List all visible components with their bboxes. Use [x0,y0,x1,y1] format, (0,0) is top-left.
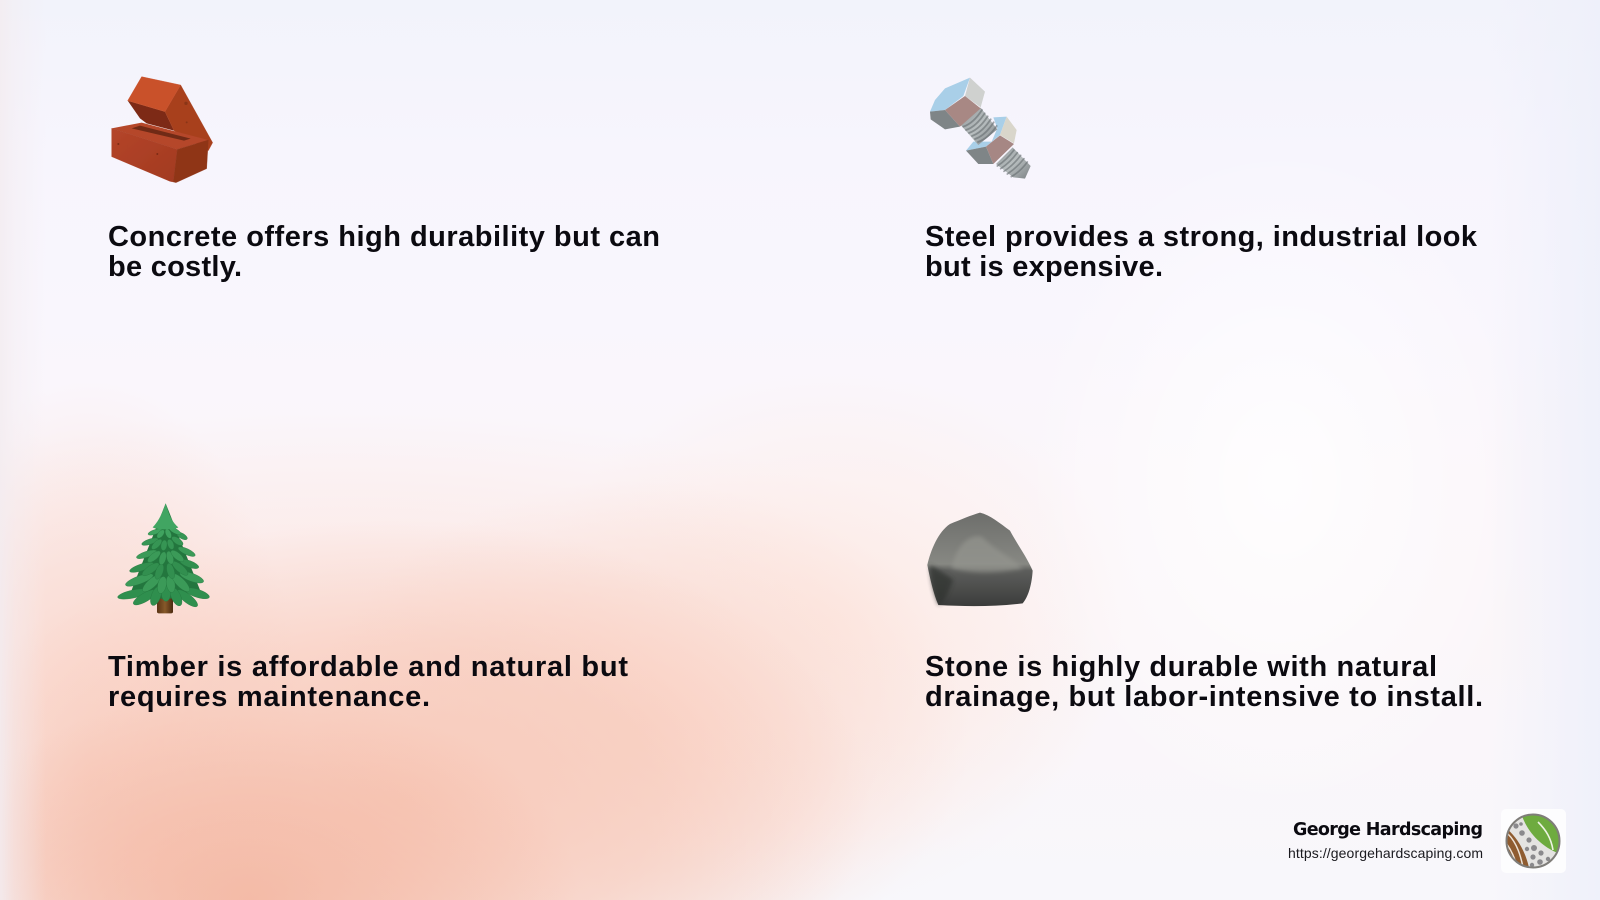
panel: concrete [108,77,660,283]
icon: brick [112,77,213,183]
panel: stone [925,513,1483,713]
icon: pine tree [117,503,211,613]
text: concrete: be costly. [108,251,242,283]
text: timber: Timber is affordable and natural but [108,651,628,683]
text: steel: Steel provides a strong, industrial look [925,221,1478,253]
panel: steel [925,78,1478,283]
brand footer [1288,809,1566,873]
brand name: George Hardscaping [1293,820,1483,840]
panel: timber [108,503,628,713]
text: steel: but is expensive. [925,251,1163,283]
text: timber: requires maintenance. [108,681,430,713]
text: stone: drainage, but labor-intensive to install. [925,681,1483,713]
logo [1501,809,1566,873]
text: stone: Stone is highly durable with natural [925,651,1437,683]
icon: bolt and nut [930,78,1031,179]
brand url: https://georgehardscaping.com [1288,845,1483,861]
text: concrete: Concrete offers high durability but can [108,221,660,253]
icon: stone [927,513,1033,606]
